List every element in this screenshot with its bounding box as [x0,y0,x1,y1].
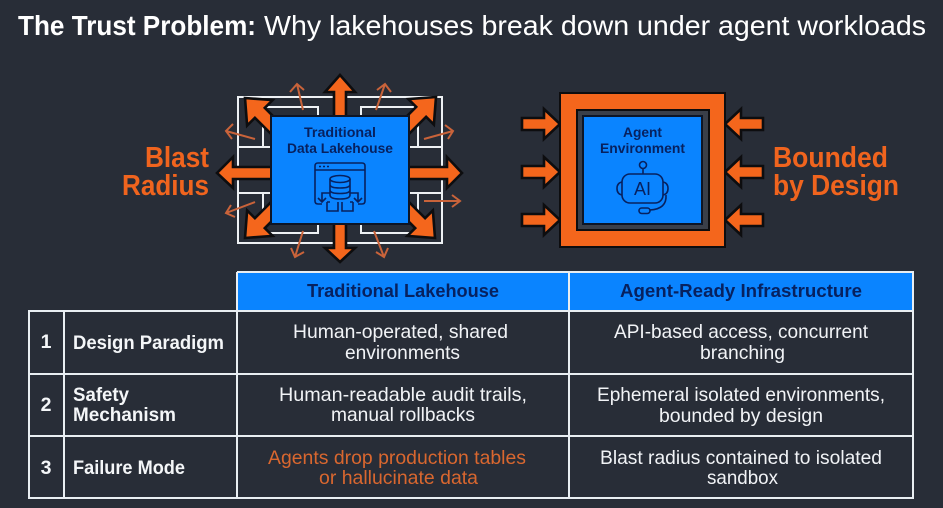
row 2: safety mechanism: Safety [73,384,129,406]
thin arrows: minor blast spread [226,84,460,257]
row 2: safety mechanism: Human-readable audit trails, [279,384,527,406]
label: blast radius: Radius [122,170,209,202]
lakehouse heading: Traditional [304,124,376,140]
inner frame [577,110,709,230]
thick arrows: blast radius [217,75,462,262]
lakehouse heading: Data Lakehouse [287,140,393,156]
row 1: design paradigm: 1 [41,331,52,353]
lakehouse box [271,116,409,224]
row 3: failure mode: Blast radius contained to isolated [600,447,882,469]
icon: AI robot [617,162,668,214]
row 3: failure mode [41,447,882,489]
row 1: design paradigm: environments [345,342,460,364]
comparison table [29,272,913,498]
row 1: design paradigm: Human-operated, shared [293,321,508,343]
table header: Agent-Ready Infrastructure [620,280,862,301]
row 1: design paradigm: API-based access, concurrent [614,321,869,343]
row 2: safety mechanism: Ephemeral isolated environments, [597,384,885,406]
icon: AI robot: AI [634,179,651,199]
lakehouse heading [287,124,393,156]
title: The Trust Problem: [18,10,256,41]
diagram: agent environment [522,93,763,247]
row 1: design paradigm: Design Paradigm [73,332,224,354]
row 2: safety mechanism: Mechanism [73,404,176,426]
row 3: failure mode: 3 [41,457,52,479]
table header: Traditional Lakehouse [307,280,499,301]
row 3: failure mode: Failure Mode [73,457,185,479]
row 1: design paradigm: branching [700,342,785,364]
row 2: safety mechanism: bounded by design [659,405,823,427]
diagram: traditional data lakehouse [217,75,462,262]
icon: database window [315,163,365,211]
label: blast radius [122,142,209,202]
row 3: failure mode: Agents drop production tables [268,447,526,469]
label: bounded by design: Bounded [773,142,888,174]
inward arrows [522,109,763,235]
label: bounded by design: by Design [773,170,899,202]
orange boundary wall [560,93,725,247]
row 2: safety mechanism: manual rollbacks [331,404,475,426]
row 2: safety mechanism: 2 [41,394,52,416]
title: Why lakehouses break down under agent workloads [264,10,926,41]
row 3: failure mode: or hallucinate data [319,467,478,489]
row 1: design paradigm [41,321,869,364]
table header [237,272,913,311]
row 3: failure mode: sandbox [707,467,778,489]
agent heading: Environment [600,140,685,156]
label: blast radius: Blast [145,142,209,174]
row 2: safety mechanism [41,384,885,427]
label: bounded by design [773,142,899,202]
agent box [583,116,702,224]
agent heading: Agent [623,124,662,140]
agent heading [600,124,685,156]
